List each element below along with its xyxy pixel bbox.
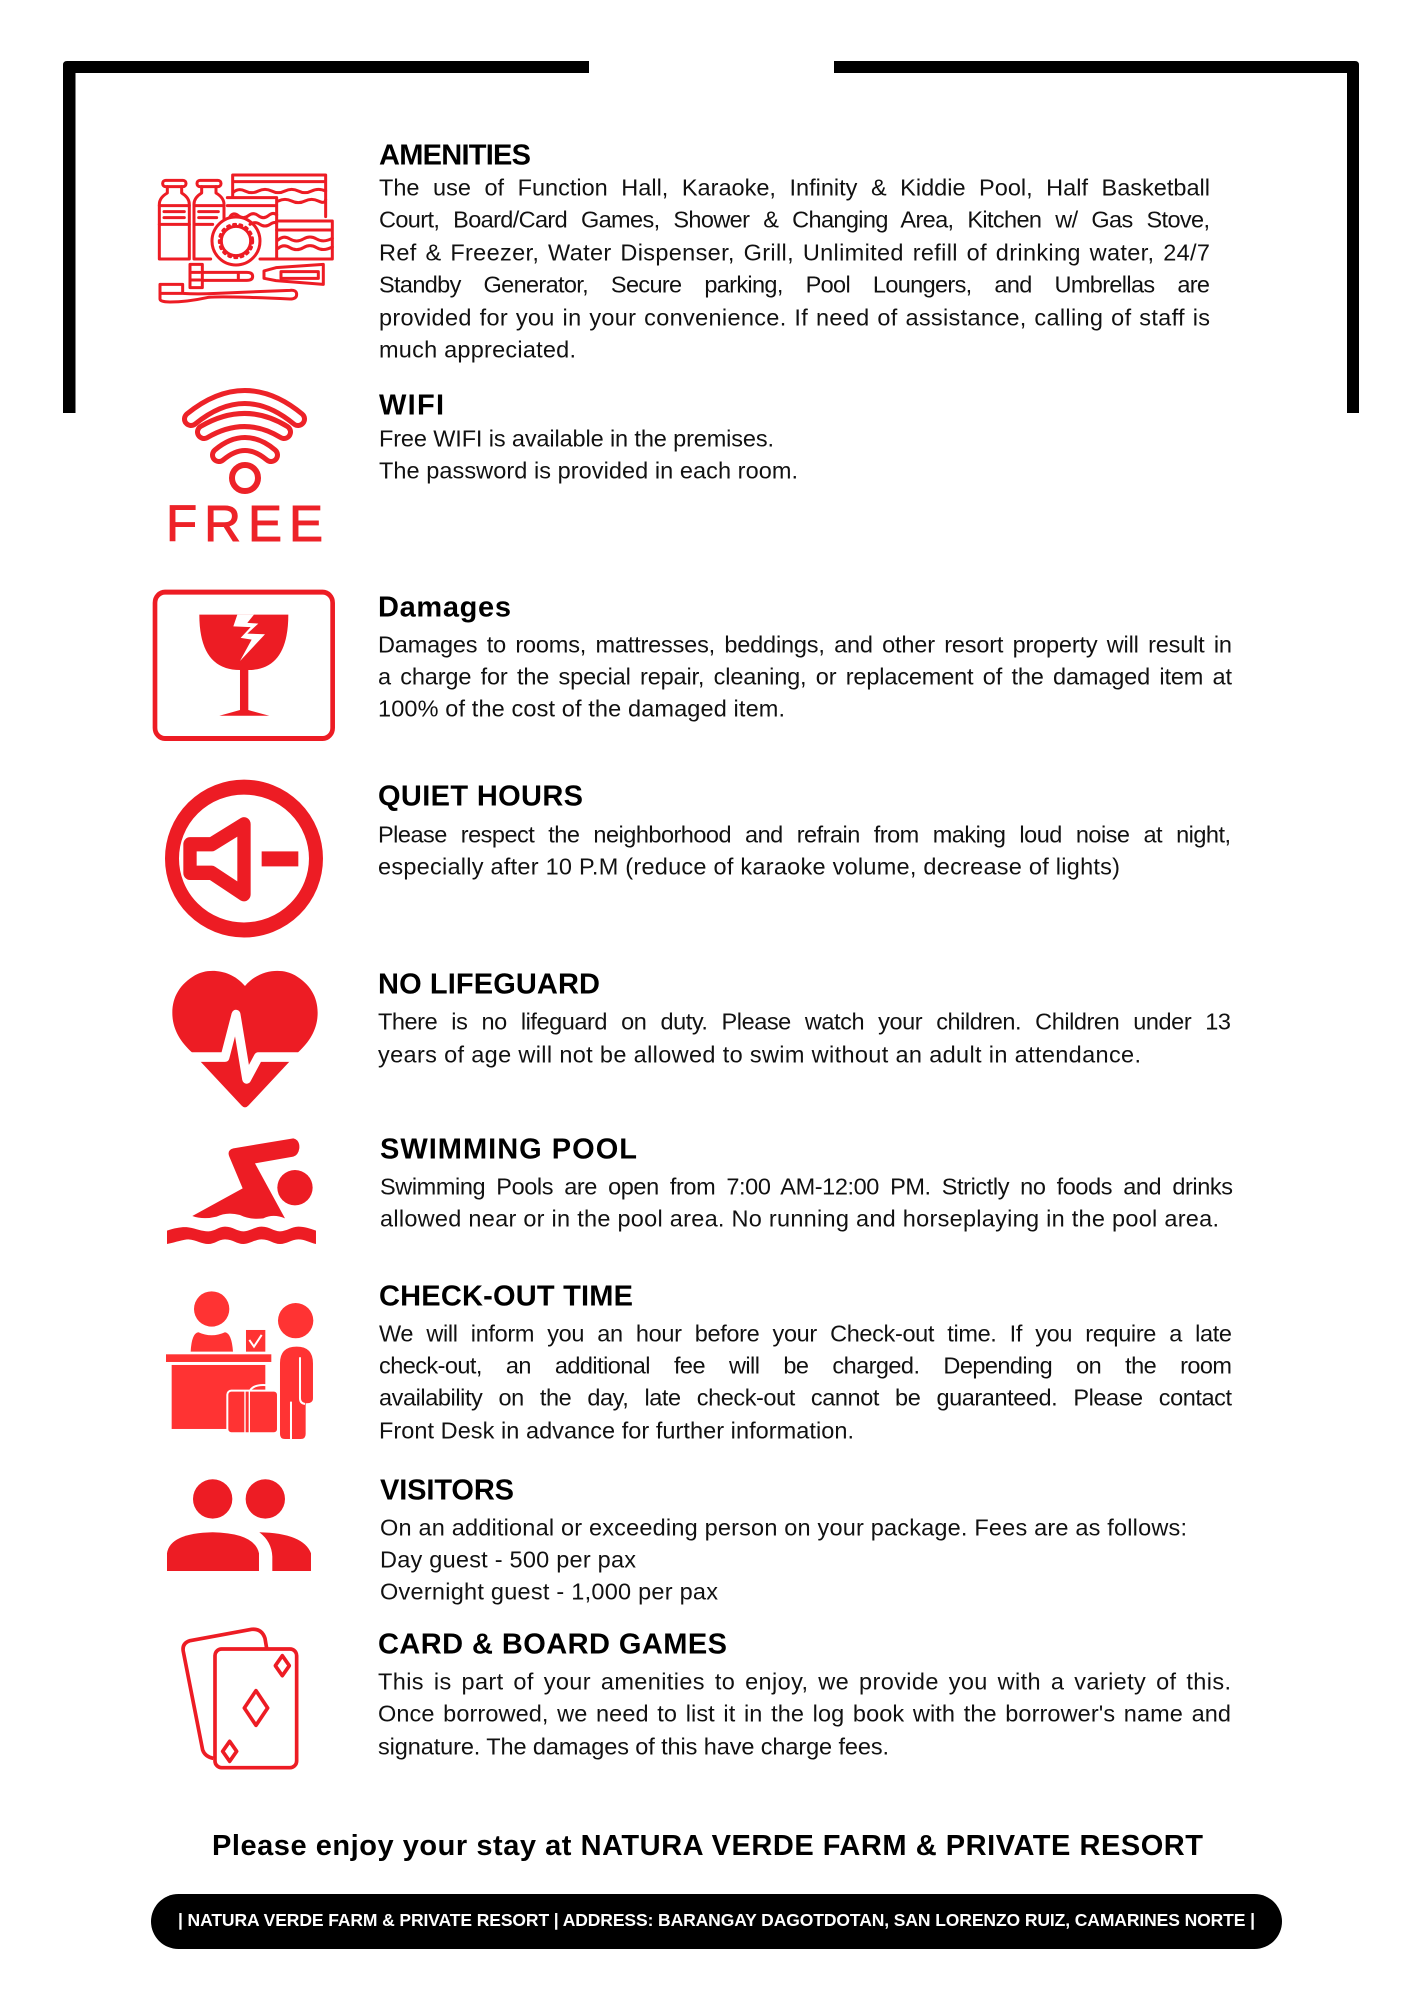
heading: damages: Damages bbox=[378, 592, 511, 624]
text block: check-out time: Front Desk in advance for further information. bbox=[379, 1418, 854, 1444]
text block: amenities: much appreciated. bbox=[379, 336, 576, 362]
text block: card and board games bbox=[378, 1668, 1231, 1760]
icon: toiletries and towels bbox=[159, 175, 332, 302]
text block: no lifeguard: There is no lifeguard on duty. Please watch your children. Children under 13 bbox=[378, 1008, 1231, 1034]
text block: damages: 100% of the cost of the damaged item. bbox=[378, 696, 785, 722]
footer bar: | NATURA VERDE FARM & PRIVATE RESORT | ADDRESS: BARANGAY DAGOTDOTAN, SAN LORENZO RUIZ, CAMARINES NORTE | bbox=[178, 1910, 1255, 1930]
text block: no lifeguard bbox=[378, 1008, 1231, 1068]
text block: check-out time: availability on the day, late check-out cannot be guaranteed. Please contact bbox=[379, 1384, 1232, 1410]
text block: quiet hours: especially after 10 P.M (reduce of karaoke volume, decrease of lights) bbox=[378, 854, 1120, 880]
text block: quiet hours: Please respect the neighborhood and refrain from making loud noise at night, bbox=[378, 822, 1231, 848]
icon: free wifi: FREE bbox=[166, 495, 323, 552]
frame: top-right bracket bbox=[834, 61, 1359, 413]
icon: fragile glass bbox=[155, 592, 333, 739]
text block: wifi: Free WIFI is available in the premises. bbox=[379, 426, 774, 452]
text block: visitors: Overnight guest - 1,000 per pax bbox=[380, 1578, 718, 1604]
icon: swimmer bbox=[167, 1138, 316, 1244]
heading: visitors: VISITORS bbox=[380, 1474, 514, 1506]
text block: visitors bbox=[380, 1514, 1187, 1604]
panel: card and board games bbox=[183, 1628, 1231, 1768]
heading: wifi: WIFI bbox=[379, 390, 444, 422]
panel: wifi bbox=[166, 390, 798, 552]
panel: swimming pool bbox=[167, 1134, 1233, 1244]
text block: amenities bbox=[379, 174, 1210, 362]
heading: amenities: AMENITIES bbox=[379, 140, 531, 172]
text block: amenities: The use of Function Hall, Karaoke, Infinity & Kiddie Pool, Half Basketball bbox=[379, 174, 1210, 200]
frame: top-left bracket bbox=[63, 61, 589, 413]
panel: visitors bbox=[167, 1474, 1187, 1604]
icon: two people bbox=[167, 1479, 311, 1571]
icon: front desk bbox=[166, 1291, 313, 1439]
text block: swimming pool bbox=[380, 1174, 1233, 1232]
icon: free wifi bbox=[166, 397, 323, 552]
heading: quiet hours: QUIET HOURS bbox=[378, 780, 583, 812]
heading: card and board games: CARD & BOARD GAMES bbox=[378, 1628, 727, 1660]
text block: visitors: Day guest - 500 per pax bbox=[380, 1546, 636, 1572]
icon: muted speaker bbox=[172, 787, 316, 930]
text block: no lifeguard: years of age will not be allowed to swim without an adult in attendance. bbox=[378, 1042, 1141, 1068]
text block: quiet hours bbox=[378, 822, 1231, 880]
panel: damages bbox=[155, 592, 1232, 739]
text block: wifi: The password is provided in each room. bbox=[379, 458, 798, 484]
panel: quiet hours bbox=[172, 780, 1231, 930]
text block: wifi bbox=[379, 426, 798, 484]
text block: check-out time: We will inform you an hour before your Check-out time. If you require a late bbox=[379, 1320, 1232, 1346]
text block: damages bbox=[378, 632, 1232, 722]
panel: amenities bbox=[159, 140, 1210, 362]
text block: visitors: On an additional or exceeding person on your package. Fees are as follows: bbox=[380, 1514, 1187, 1540]
panel: no lifeguard bbox=[170, 968, 1231, 1107]
heading: check-out time: CHECK-OUT TIME bbox=[379, 1280, 633, 1312]
footer bar bbox=[151, 1894, 1282, 1949]
text block: card and board games: This is part of your amenities to enjoy, we provide you with a variety of this. bbox=[378, 1668, 1231, 1694]
closing message: Please enjoy your stay at NATURA VERDE FARM & PRIVATE RESORT bbox=[212, 1830, 1203, 1862]
text block: card and board games: signature. The damages of this have charge fees. bbox=[378, 1734, 889, 1760]
text block: amenities: provided for you in your convenience. If need of assistance, calling of staff is bbox=[379, 304, 1210, 330]
heading: swimming pool: SWIMMING POOL bbox=[380, 1134, 637, 1166]
panel: check-out time bbox=[166, 1280, 1232, 1444]
text block: amenities: Ref & Freezer, Water Dispenser, Grill, Unlimited refill of drinking water, 24/7 bbox=[379, 240, 1210, 266]
text block: amenities: Standby Generator, Secure parking, Pool Loungers, and Umbrellas are bbox=[379, 272, 1210, 298]
text block: swimming pool: Swimming Pools are open from 7:00 AM-12:00 PM. Strictly no foods and drinks bbox=[380, 1174, 1233, 1200]
text block: check-out time bbox=[379, 1320, 1232, 1444]
text block: damages: a charge for the special repair, cleaning, or replacement of the damaged item at bbox=[378, 664, 1232, 690]
text block: damages: Damages to rooms, mattresses, beddings, and other resort property will result in bbox=[378, 632, 1232, 658]
text block: swimming pool: allowed near or in the pool area. No running and horseplaying in the pool area. bbox=[380, 1206, 1219, 1232]
heading: no lifeguard: NO LIFEGUARD bbox=[378, 968, 600, 1000]
icon: heart with pulse bbox=[170, 971, 320, 1107]
text block: check-out time: check-out, an additional fee will be charged. Depending on the room bbox=[379, 1352, 1232, 1378]
icon: playing cards bbox=[183, 1629, 297, 1768]
text block: amenities: Court, Board/Card Games, Shower & Changing Area, Kitchen w/ Gas Stove, bbox=[379, 206, 1210, 232]
text block: card and board games: Once borrowed, we need to list it in the log book with the borrower's name and bbox=[378, 1700, 1231, 1726]
